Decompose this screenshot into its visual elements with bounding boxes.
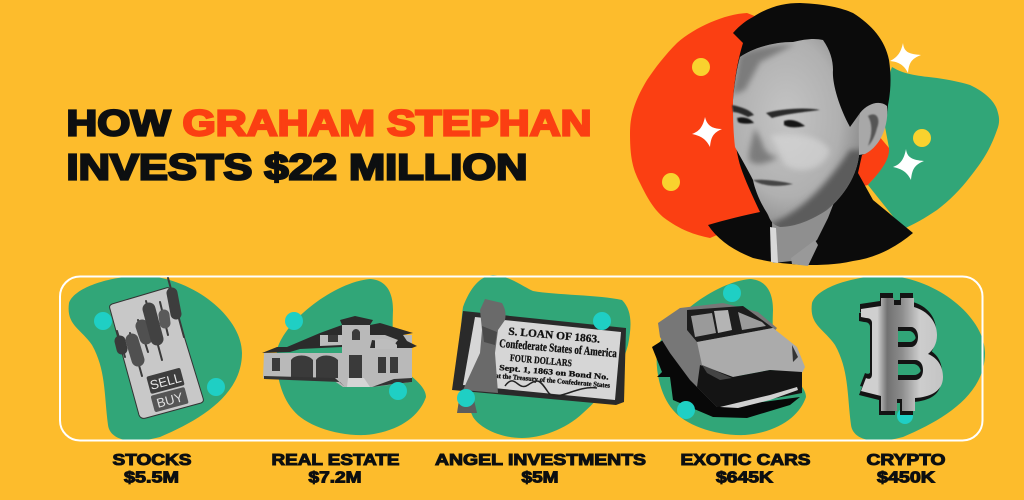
roofs <box>262 316 417 353</box>
face shading <box>732 44 866 232</box>
shirt collar check <box>770 227 778 263</box>
upper wing walls <box>320 335 397 349</box>
portrait illustration <box>630 3 999 266</box>
label: real estate <box>272 452 400 486</box>
teal dots <box>593 312 611 330</box>
title: GRAHAM STEPHAN <box>182 102 592 144</box>
extrusion <box>859 293 942 415</box>
front face <box>861 298 943 411</box>
red blob <box>630 13 889 238</box>
title: INVESTS $22 MILLION <box>66 146 528 188</box>
label: crypto: CRYPTO <box>866 452 946 469</box>
note text: Confederate States of America <box>499 336 617 360</box>
teal dots <box>723 284 741 302</box>
icon: exotic car <box>652 284 805 419</box>
label: angel investments <box>435 452 646 486</box>
label: exotic cars <box>680 452 810 486</box>
label: angel investments: ANGEL INVESTMENTS <box>435 452 646 469</box>
nose shadow <box>749 128 778 164</box>
teal dot <box>389 382 407 400</box>
windshield frame and interior <box>687 306 773 342</box>
eyes <box>737 117 805 127</box>
title <box>66 102 592 188</box>
note text: at the Treasury of the Confederate States <box>495 372 611 390</box>
note text: FOUR DOLLARS <box>510 353 573 369</box>
man: head and jacket silhouette <box>708 3 913 265</box>
blob: crypto <box>812 276 985 441</box>
label: real estate: REAL ESTATE <box>272 452 400 469</box>
note text <box>495 325 618 390</box>
label: angel investments: $5M <box>522 470 558 486</box>
teal dots behind items <box>94 312 913 424</box>
eyebrows <box>732 105 820 118</box>
rounded frame <box>60 276 982 440</box>
label: crypto <box>866 452 946 486</box>
buy button: BUY <box>155 389 185 411</box>
neck <box>772 200 835 263</box>
label: crypto: $450K <box>877 470 936 486</box>
blobs behind investment items <box>69 275 985 441</box>
icon: house <box>262 316 417 400</box>
hood <box>697 328 805 377</box>
label: exotic cars: EXOTIC CARS <box>680 452 810 469</box>
green blob <box>868 67 999 229</box>
face <box>733 39 860 227</box>
blob: real estate <box>277 279 426 435</box>
signature <box>505 381 597 396</box>
teal dot on phone edge <box>207 378 225 396</box>
car shadow <box>652 340 800 418</box>
note text: Sept. 1, 1863 on Bond No. <box>499 363 609 382</box>
front path <box>347 378 370 387</box>
candlesticks <box>117 278 184 376</box>
icon: confederate bank note <box>452 299 626 413</box>
blob: stocks <box>69 276 242 441</box>
icon: stock phone <box>110 278 225 418</box>
sell button: SELL <box>148 370 183 393</box>
porch and windows <box>272 329 398 378</box>
blob: exotic cars <box>657 279 806 435</box>
sparkles <box>692 43 924 180</box>
label: exotic cars: $645K <box>716 470 774 486</box>
blob: angel investments <box>461 275 630 438</box>
rope <box>463 299 506 393</box>
walls <box>263 325 412 387</box>
headlights <box>702 365 732 380</box>
ear <box>859 103 887 155</box>
label: stocks: $5.5M <box>124 470 179 486</box>
title: HOW <box>66 102 171 144</box>
label: real estate: $7.2M <box>308 470 362 486</box>
mouth <box>753 180 793 186</box>
front bumper <box>697 365 802 407</box>
yellow dots <box>662 58 931 191</box>
car side <box>658 303 777 407</box>
label: stocks: STOCKS <box>112 452 192 469</box>
label: stocks <box>112 452 192 486</box>
icon: bitcoin symbol <box>859 293 943 415</box>
note text: S. LOAN OF 1863. <box>508 326 601 346</box>
buy button <box>151 387 189 412</box>
